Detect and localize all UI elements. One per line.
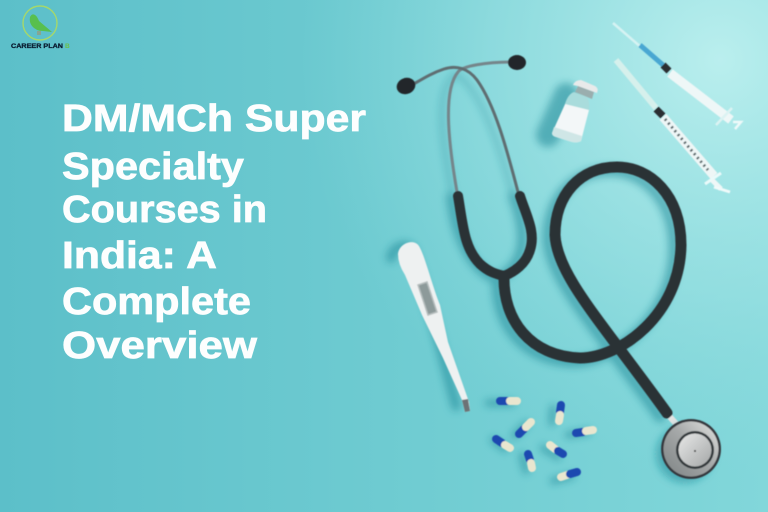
title: India: A — [62, 235, 217, 277]
chest piece — [656, 419, 721, 483]
logo: Career Plan B — [11, 6, 70, 50]
syringe lower — [616, 60, 730, 192]
title — [62, 98, 366, 367]
capsule 4 — [576, 430, 593, 433]
title: Specialty — [62, 146, 244, 188]
vial — [552, 80, 598, 142]
capsule 7 — [528, 454, 532, 468]
capsule 3 — [519, 422, 531, 434]
thermometer — [398, 242, 470, 412]
capsule 1 — [500, 397, 517, 405]
main tube — [504, 167, 681, 413]
metal stem — [670, 417, 686, 435]
capsule 2 — [559, 405, 561, 421]
capsules — [496, 401, 593, 477]
title: Courses in — [62, 189, 267, 231]
eartube left metal — [448, 62, 513, 192]
logo: Career Plan B: B — [65, 43, 70, 50]
title: DM/MCh Super — [62, 98, 366, 140]
stethoscope — [394, 55, 686, 435]
capsule 5 — [496, 439, 510, 448]
title: Overview — [62, 325, 258, 367]
capsule 6 — [550, 445, 563, 454]
shadows of objects — [391, 74, 674, 481]
capsule 8 — [561, 472, 577, 477]
logo: Career Plan B: CAREER PLAN — [11, 43, 63, 50]
eartube right metal — [412, 67, 518, 192]
left binaural black — [458, 196, 504, 276]
title: Complete — [62, 281, 251, 323]
right binaural black — [504, 196, 532, 276]
left ear tip — [394, 75, 418, 97]
syringe upper — [613, 23, 741, 129]
right ear tip — [508, 55, 526, 70]
